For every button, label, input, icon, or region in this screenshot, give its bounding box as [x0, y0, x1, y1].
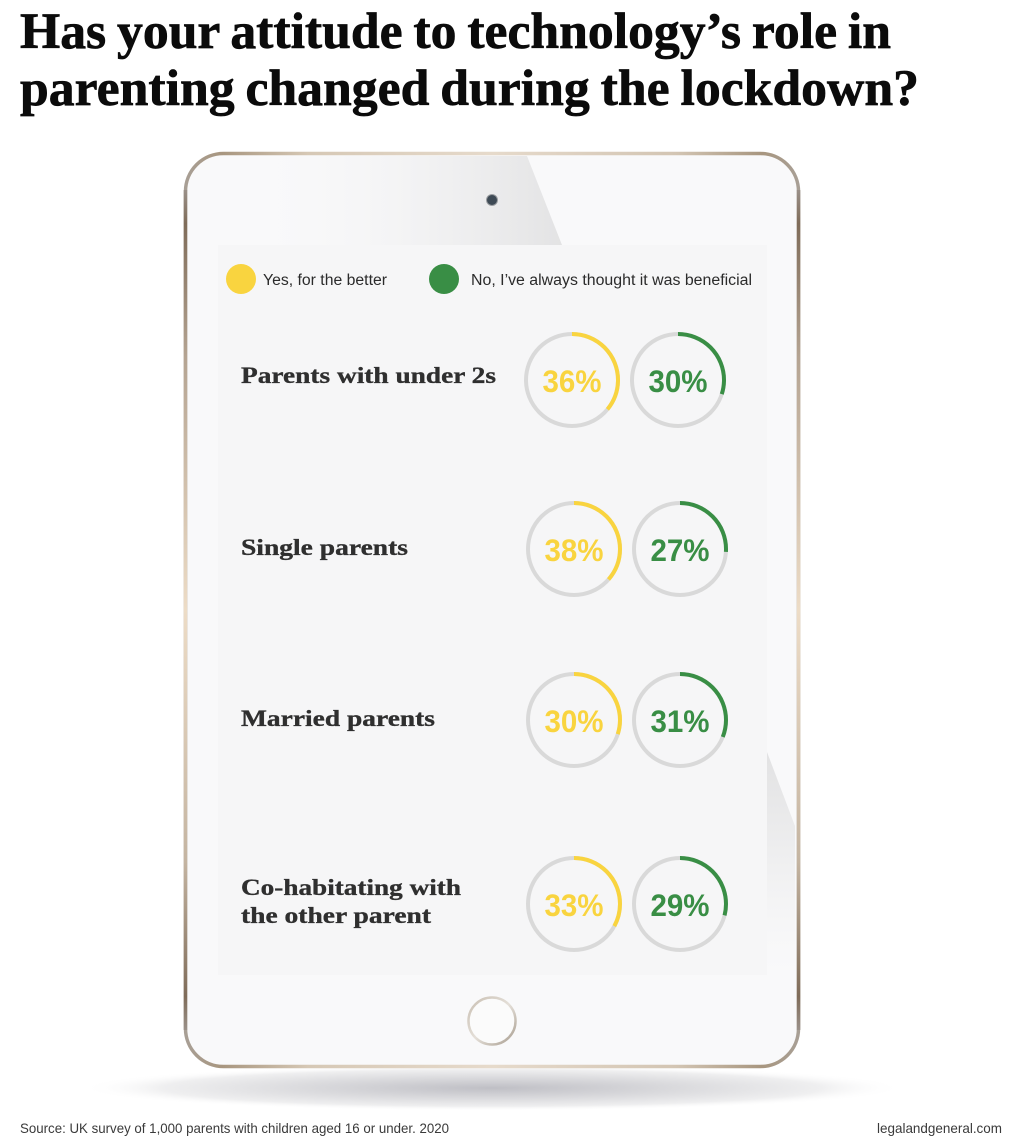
frame left edge [184, 190, 187, 1030]
row: parents with under 2s [241, 334, 724, 426]
label [241, 875, 461, 928]
screen panel [218, 245, 767, 975]
tablet frame [186, 154, 798, 1066]
ring: no 30% [632, 334, 724, 426]
ring: yes 36% [526, 334, 618, 426]
ring: no 30%: 30% [648, 363, 708, 399]
legend: no swatch [429, 264, 459, 294]
source note: Source: UK survey of 1,000 parents with children aged 16 or under. 2020 [20, 1120, 449, 1136]
label: Co-habitating with [241, 875, 461, 900]
label: Single parents [241, 535, 408, 560]
ring: yes 30%: 30% [544, 703, 604, 739]
ring: yes 33%: 33% [544, 887, 604, 923]
label: the other parent [241, 903, 431, 928]
label: Parents with under 2s [241, 363, 496, 388]
ring: no 29%: 29% [650, 887, 710, 923]
site credit: legalandgeneral.com [877, 1120, 1002, 1136]
title [20, 4, 919, 117]
home button [468, 998, 516, 1044]
label: Married parents [241, 706, 435, 731]
camera [486, 194, 498, 206]
row: single parents [241, 503, 726, 595]
ring: no 27% [634, 503, 726, 595]
legend [226, 264, 752, 294]
tablet shadow [80, 1065, 904, 1111]
title: Has your attitude to technology’s role in [20, 4, 891, 60]
side screen glare [767, 752, 795, 975]
ring: yes 38% [528, 503, 620, 595]
legend: no label: No, I’ve always thought it was beneficial [471, 272, 752, 289]
ring: no 29% [634, 858, 726, 950]
ring: no 31%: 31% [650, 703, 710, 739]
ring: yes 36%: 36% [542, 363, 602, 399]
ring: no 27%: 27% [650, 532, 710, 568]
legend: yes label: Yes, for the better [263, 272, 387, 289]
row: married parents [241, 674, 726, 766]
legend: yes swatch [226, 264, 256, 294]
ring: yes 38%: 38% [544, 532, 604, 568]
ring: yes 30% [528, 674, 620, 766]
title: parenting changed during the lockdown? [20, 61, 919, 117]
top screen glare [260, 156, 562, 245]
row: co-habitating with the other parent [241, 858, 726, 950]
ring: no 31% [634, 674, 726, 766]
frame right edge [797, 190, 800, 1030]
ring: yes 33% [528, 858, 620, 950]
tablet device [184, 154, 800, 1066]
